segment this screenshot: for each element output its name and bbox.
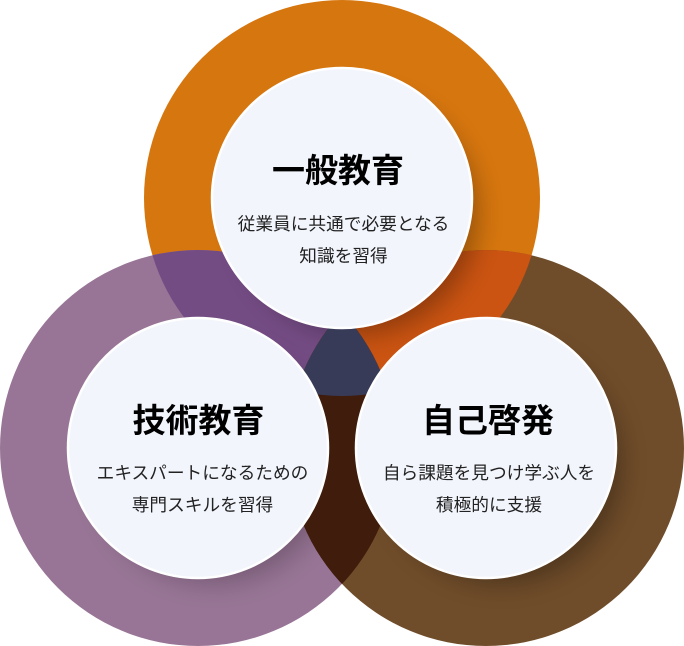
heading: self development: 自己啓発 <box>422 402 554 439</box>
heading: technical education: 技術教育 <box>132 402 264 439</box>
overlap: orange and brown <box>304 250 532 370</box>
text: technical education description line 2: 専門スキルを習得 <box>132 495 273 515</box>
text: technical education description: エキスパートになるための <box>97 463 308 483</box>
text: self development description line 2: 積極的に支援 <box>436 495 542 515</box>
panel: technical education <box>68 318 328 578</box>
panel: general education <box>212 68 472 328</box>
heading: general education: 一般教育 <box>272 152 404 189</box>
inner circle shadows <box>94 94 622 584</box>
overlap: purple and brown lower patch kept flat <box>304 448 380 584</box>
overlap: purple and brown <box>304 328 380 584</box>
overlap: center of all three <box>304 328 380 396</box>
text: general education description: 従業員に共通で必要となる <box>238 214 449 234</box>
overlap: orange and purple <box>152 250 328 370</box>
ring: brown self development <box>288 250 684 646</box>
text: self development description: 自ら課題を見つけ学ぶ人を <box>383 463 595 483</box>
text: general education description line 2: 知識を習得 <box>299 246 388 266</box>
ring: purple technical education <box>0 250 396 646</box>
ring: orange general education <box>144 0 540 396</box>
panel: self development <box>356 318 616 578</box>
